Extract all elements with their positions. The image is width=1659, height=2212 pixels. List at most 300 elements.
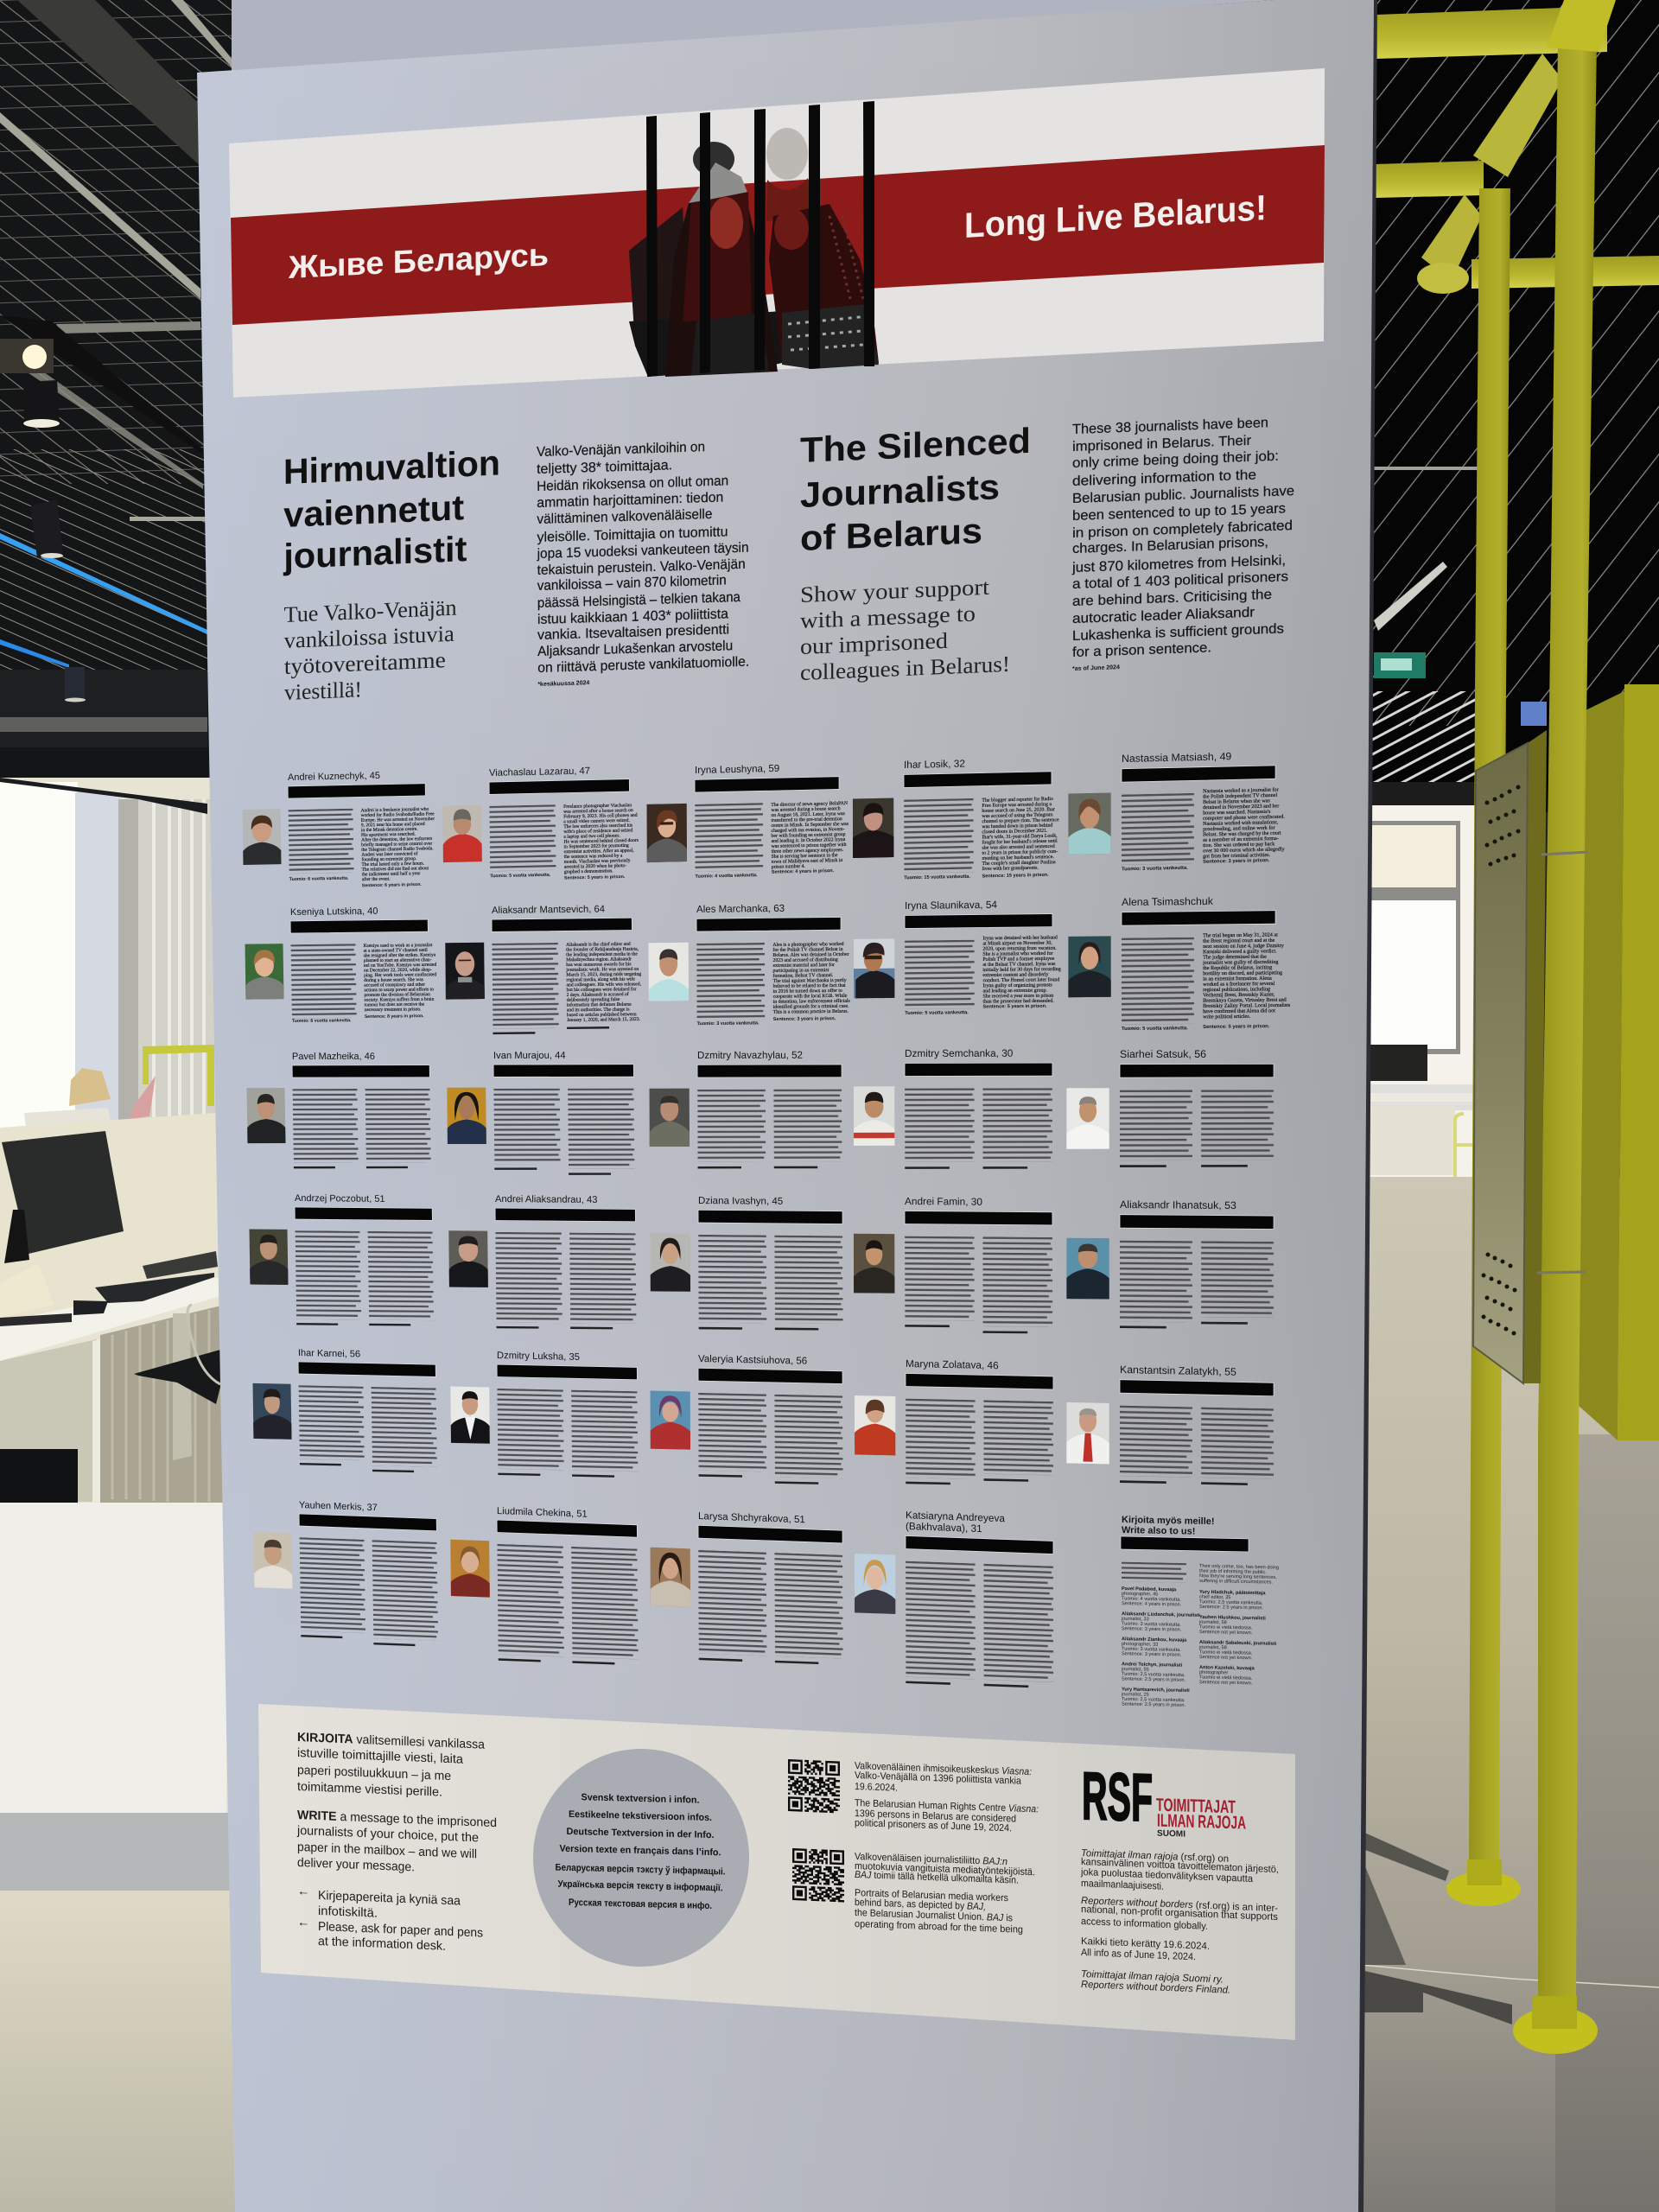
Finnish and English call to action: paper in the mailbox – and we will — [297, 1840, 477, 1861]
translations list — [555, 1792, 726, 1911]
Finnish bio (illegible) — [695, 803, 763, 872]
English bio: ber with founding an extremist group — [772, 831, 846, 839]
English bio: was arrested during a house search — [771, 806, 841, 813]
English bio: but his colleagues were detained for — [567, 986, 637, 993]
English bio: deliberately spreading false — [567, 996, 620, 1003]
Finnish intro text: on riittävä peruste vankilatuomiolle. — [537, 655, 749, 676]
journalist card: Kseniya Lutskina — [245, 906, 437, 1025]
portrait — [448, 1230, 488, 1287]
Finnish intro text: Aljaksandr Lukašenkan arvostelu — [537, 639, 733, 659]
Finnish bio (illegible) — [489, 804, 556, 871]
English bio: His apartment was searched. — [361, 832, 416, 838]
journalist card: Andrei Kuznechyk: Sentence: 6 years in prison. — [362, 882, 422, 888]
English heading and subtitle: with a message to — [800, 601, 976, 633]
journalist card: Andrei Aliaksandrau: Andrei Aliaksandrau, 43 — [495, 1194, 598, 1205]
English bio: centre in Minsk. In September she was — [771, 822, 849, 829]
journalist card: Dziana Ivashyn: Dziana Ivashyn, 45 — [698, 1196, 783, 1207]
English bio: cooperate with the local KGB. While — [773, 994, 848, 1000]
write to us card: Write also to us! — [1122, 1525, 1195, 1537]
English bio: the Telegram channel Radio Svaboda. — [361, 846, 434, 853]
English bio: conduct. The Homel court later found — [982, 976, 1059, 983]
journalist card: Maryna Zolatava — [855, 1357, 1053, 1487]
English bio: she resigned after the strikes. Kseniya — [364, 951, 436, 958]
journalist card: Siarhei Satsuk — [1066, 1048, 1274, 1167]
English bio: He was sentenced behind closed doors — [563, 838, 639, 845]
English bio: wife's place of residence and seized — [563, 827, 633, 835]
Finnish heading and subtitle: viestillä! — [284, 677, 362, 705]
journalist card: Aliaksandr Mantsevich — [445, 904, 642, 1035]
journalist card: Kseniya Lutskina: Sentence: 8 years in prison. — [365, 1014, 424, 1020]
English bio: After the detention, the law enforcers — [361, 836, 432, 843]
English bio: The trial lasted only a few hours. — [361, 861, 425, 868]
QR code: Viasna — [788, 1760, 840, 1812]
journalist card: Siarhei Satsuk: Siarhei Satsuk, 56 — [1120, 1048, 1206, 1060]
RSF logo: SUOMI — [1157, 1829, 1185, 1840]
English bio: Karaiski delivered a guilty verdict. — [1203, 949, 1277, 955]
Viasna text: Valkovenäläinen ihmisoikeuskeskus Viasna: — [855, 1761, 1032, 1777]
English bio: Iryna guilty of organizing protests — [982, 982, 1053, 988]
RSF description: Reporters without borders Finland. — [1081, 1980, 1230, 1996]
bio columns (illegible) — [905, 1236, 1052, 1334]
English bio: extremist content and disorderly — [982, 972, 1049, 978]
portrait — [253, 1532, 292, 1589]
Finnish intro text: yleisölle. Toimittajia on tuomittu — [537, 524, 728, 545]
Finnish heading and subtitle: vankiloissa istuvia — [284, 621, 454, 653]
portrait — [854, 938, 894, 998]
portrait — [445, 943, 485, 1000]
BAJ text: the Belarusian Journalist Union. BAJ is — [855, 1908, 1013, 1923]
English bio: lives with her grandparents. — [982, 866, 1039, 872]
English bio: regional publications, including — [1203, 987, 1270, 993]
English bio: Maladzyechna region. Aliaksandr — [566, 957, 632, 963]
Finnish and English call to action: at the information desk. — [318, 1935, 446, 1954]
list column one: Tuomio: 2,5 vuotta vankeutta. — [1122, 1672, 1185, 1678]
Finnish bio (illegible) — [291, 944, 357, 1019]
English bio: She is a journalist who worked for — [982, 950, 1053, 957]
English intro: suffering in difficult circumstances. — [1199, 1579, 1273, 1586]
English bio: Ihar's wife, 31-year-old Darya Losik, — [982, 833, 1058, 840]
RSF logo: TOIMITTAJAT — [1156, 1796, 1236, 1817]
bottom information panel — [258, 1704, 1295, 2040]
Finnish intro text: vankiloissa – vain 870 kilometrin — [537, 573, 727, 594]
journalist card: Liudmila Chekina: Liudmila Chekina, 51 — [497, 1506, 588, 1520]
English bio: 2 days. Aliaksandr is accused of — [567, 991, 629, 998]
Finnish intro text: tekaistuin perustein. Valko-Venäjän — [537, 557, 746, 578]
Finnish and English call to action: deliver your message. — [297, 1856, 415, 1874]
English bio: Iryna was detained with her husband — [982, 935, 1058, 941]
English bio: extremist activities. After an appeal, — [564, 847, 634, 855]
English bio: Europe. He was arrested on November — [361, 817, 435, 823]
bio columns (illegible) — [493, 1089, 635, 1175]
journalist card: Andrei Famin — [854, 1196, 1052, 1334]
English bio: house was searched. Nastassia's — [1203, 810, 1271, 816]
journalist card: Ihar Losik: Tuomio: 15 vuotta vankeutta. — [904, 874, 970, 880]
English bio: the sentence was reduced by a — [564, 854, 623, 860]
English bio: ping. Her work tools were confiscated — [364, 971, 436, 978]
English bio: worked for Radio Svaboda/Radio Free — [361, 810, 435, 818]
English bio: Andrei is a freelance journalist who — [361, 806, 429, 813]
bio columns (illegible) — [698, 1550, 843, 1665]
portrait — [651, 1548, 690, 1607]
journalist card: Larysa Shchyrakova: Larysa Shchyrakova, 51 — [698, 1511, 805, 1525]
portrait — [854, 1234, 894, 1294]
journalist card: Dziana Ivashyn — [650, 1196, 843, 1331]
list column one: journalist, 25 — [1121, 1692, 1149, 1698]
list column one: Sentence: 4 years in prison. — [1122, 1601, 1182, 1607]
poster panel — [197, 0, 1377, 2212]
English intro text: Belarusian public. Journalists have — [1072, 484, 1294, 506]
portrait — [855, 1554, 895, 1614]
flag stripes — [229, 68, 1325, 397]
English heading and subtitle: Journalists — [800, 467, 1000, 515]
English bio: she was also arrested and sentenced — [982, 844, 1055, 851]
banner text: Belarusian: Жыве Беларусь — [288, 236, 549, 285]
English bio: The blogger and reporter for Radio — [982, 796, 1053, 804]
BAJ text: BAJ toimii tällä hetkellä ulkomailta käsin. — [855, 1870, 1019, 1886]
list column one: Aliaksandr Ziankou, kuvaaja — [1122, 1637, 1187, 1643]
English bio: regional media, along with his wife — [566, 976, 635, 982]
English bio: graphed a demonstration. — [564, 868, 613, 874]
grey language circle — [533, 1749, 749, 1967]
English heading and subtitle: colleagues in Belarus! — [800, 652, 1010, 685]
English intro text: for a prison sentence. — [1072, 640, 1211, 660]
English bio: has won numerous awards for his — [566, 961, 632, 968]
Finnish intro text: ammatin harjoittaminen: tiedon — [537, 491, 723, 511]
list column two: Tuomio: 2,5 vuotta vankeutta. — [1199, 1599, 1263, 1606]
bio columns (illegible) — [698, 1235, 843, 1331]
English bio: on August 18, 2021. Later, Iryna was — [771, 811, 846, 818]
translations list: Svensk textversion i infon. — [581, 1792, 700, 1806]
English bio: promote the division of Belarusian — [364, 991, 430, 998]
English intro text — [1071, 415, 1294, 672]
Viasna text: The Belarusian Human Rights Centre Viasna: — [855, 1798, 1039, 1815]
journalist card: Viachaslau Lazarau: Tuomio: 5 vuotta vankeutta. — [490, 873, 551, 879]
journalist card: Andrei Kuznechyk: Andrei Kuznechyk, 45 — [288, 771, 380, 783]
bio columns (illegible) — [299, 1385, 437, 1473]
RSF description: Kaikki tieto kerätty 19.6.2024. — [1081, 1936, 1210, 1952]
Finnish intro (illegible) — [1122, 1562, 1186, 1583]
English intro: Now they're serving long sentences, — [1199, 1573, 1277, 1580]
BAJ text: operating from abroad for the time being — [855, 1919, 1023, 1936]
list column one: Sentence: 2.5 years in prison. — [1122, 1702, 1185, 1708]
journalist card: Yauhen Merkis — [253, 1498, 438, 1647]
journalist card: Dzmitry Luksha: Dzmitry Luksha, 35 — [497, 1351, 580, 1363]
list column two: Anton Kazelski, kuvaaja — [1199, 1665, 1255, 1671]
list column two: Sentence: 2.5 years in prison. — [1199, 1605, 1263, 1611]
English bio: computer and phone were confiscated. — [1203, 814, 1285, 822]
journalist card: Iryna Leushyna: Sentence: 4 years in prison. — [772, 868, 835, 875]
Finnish intro text — [536, 439, 749, 688]
English bio: The trial began on May 31, 2024 at — [1203, 932, 1278, 938]
English bio: the indictment until half a year — [362, 870, 421, 877]
bio columns (illegible) — [698, 1393, 843, 1485]
English bio: fought for her husband's release until — [982, 838, 1058, 846]
RSF description: access to information globally. — [1081, 1916, 1208, 1932]
English bio: This is a common practice in Belarus. — [773, 1009, 849, 1015]
Finnish and English call to action: Kirjepapereita ja kyniä saa — [318, 1889, 461, 1909]
English bio: The judge determined that the — [1203, 955, 1267, 960]
journalist card: Ivan Murajou — [447, 1051, 635, 1175]
English bio: believed to be related to the fact that — [773, 982, 846, 989]
translations list: Беларуская версія тэксту ў інфармацыі. — [555, 1863, 726, 1877]
English bio: on December 22, 2020, while shop- — [364, 968, 432, 973]
Finnish bio (illegible) — [492, 943, 559, 1029]
portrait — [447, 1088, 486, 1144]
list column two: Aliaksandr Sabaleuski, journalisti — [1199, 1640, 1277, 1647]
English bio: tumour but does not receive the — [365, 1002, 425, 1007]
English bio: the founder of Rehijanalnaja Hazieta, — [566, 946, 639, 953]
portrait — [1068, 936, 1111, 997]
English bio: got from her criminal activities. — [1203, 852, 1271, 860]
portrait — [243, 809, 281, 865]
Finnish and English call to action: KIRJOITA valitsemillesi vankilassa — [297, 1731, 486, 1752]
list column two: Sentence not yet known. — [1199, 1680, 1253, 1686]
English bio: was handed down in prison behind — [982, 823, 1052, 830]
English sentence line (illegible) — [567, 1027, 609, 1029]
Finnish bio (illegible) — [1122, 938, 1194, 1025]
bio columns (illegible) — [497, 1544, 639, 1665]
journalist card: Viachaslau Lazarau — [442, 765, 639, 884]
Finnish and English call to action: istuville toimittajille viesti, laita — [297, 1746, 464, 1767]
English intro: Their only crime, too, has been doing — [1199, 1564, 1279, 1571]
English bio: The couple's small daughter Paulina — [982, 860, 1056, 867]
journalist card: Andrzej Poczobut — [249, 1193, 434, 1326]
journalist card: Kanstantsin Zalatykh: Kanstantsin Zalatykh, 55 — [1120, 1363, 1236, 1378]
BAJ text: muotokuvia vangituista mediatyöntekijöistä. — [855, 1861, 1035, 1878]
English heading and subtitle: The Silenced — [800, 421, 1031, 470]
English bio: 2023 and accused of distributing — [772, 957, 838, 963]
English bio: based on articles published between — [567, 1012, 637, 1018]
list column one: Andrei Tolchyn, journalisti — [1122, 1662, 1183, 1669]
English heading and subtitle: Show your support — [800, 575, 990, 607]
English bio: participating in an extremist — [773, 968, 830, 974]
Viasna text: 19.6.2024. — [855, 1782, 898, 1794]
journalist card: Ales Marchanka — [648, 903, 851, 1027]
translations list: Deutsche Textversion in der Info. — [567, 1827, 714, 1840]
English bio: Belsat. She was charged by the court — [1203, 831, 1281, 838]
journalist card: Alena Tsimashchuk — [1068, 894, 1291, 1033]
English bio: the leading independent media in the — [566, 951, 638, 957]
bio columns (illegible) — [293, 1089, 431, 1168]
bio columns (illegible) — [1120, 1090, 1274, 1167]
QR code: BAJ — [792, 1849, 844, 1901]
journalist card: Aliaksandr Ihanatsuk — [1066, 1198, 1274, 1329]
English bio: at the Belsat TV channel. Iryna was — [982, 962, 1056, 968]
bio columns (illegible) — [1120, 1406, 1274, 1486]
English bio: in detention, law enforcement officials — [773, 998, 851, 1005]
journalist card: Larysa Shchyrakova — [650, 1510, 843, 1665]
English bio: a laptop and two cell phones. — [563, 833, 620, 840]
English bio: worked as a freelancer for several — [1203, 981, 1275, 988]
journalist card: Alena Tsimashchuk: Tuomio: 5 vuotta vankeutta. — [1122, 1026, 1188, 1032]
English bio: three other news agency employees. — [772, 848, 844, 855]
Finnish intro text: istuu kaikkiaan 1 403* poliittista — [537, 607, 728, 627]
RSF description — [1080, 1848, 1279, 1998]
journalist card: Iryna Slaunikava: Sentence: 5 years in prison. — [983, 1004, 1047, 1010]
English bio: house search on June 25, 2020. Ihar — [982, 807, 1055, 814]
journalist card: Ihar Losik: Sentence: 15 years in prison. — [982, 873, 1049, 879]
BAJ text: behind bars, as depicted by BAJ, — [855, 1897, 986, 1912]
list column one: Sentence: 3 years in prison. — [1122, 1626, 1182, 1633]
list column two: Tuomio ei vielä tiedossa. — [1199, 1675, 1253, 1681]
portrait — [649, 943, 689, 1001]
journalist card: Ihar Losik — [853, 756, 1059, 882]
journalist card: Nastassia Matsiash: Sentence: 3 years in prison. — [1203, 858, 1270, 865]
English heading and subtitle: of Belarus — [800, 511, 982, 558]
English bio: formation, Belsat TV channel. — [773, 972, 834, 979]
BAJ text — [855, 1852, 1035, 1936]
English bio: and leading it. In October 2022 Iryna — [772, 837, 846, 844]
English bio: closed doors in December 2021. — [982, 829, 1048, 835]
Finnish bio (illegible) — [289, 809, 354, 874]
translations list: Eestikeelne tekstiversioon infos. — [569, 1809, 712, 1823]
portrait — [247, 1088, 285, 1143]
journalist card: Katsiaryna Andreyeva: (Bakhvalava), 31 — [906, 1520, 982, 1535]
English bio: accused of conspiracy and other — [364, 982, 425, 988]
English bio: and colleagues. His wife was released, — [567, 981, 642, 988]
English bio: in September 2023 for promoting — [564, 842, 629, 849]
English bio: The director of news agency BelaPAN — [771, 800, 849, 808]
English bio: 9, 2021 near his home and placed — [361, 822, 425, 828]
Finnish intro text: vankia. Itsevaltaisen presidentti — [537, 622, 729, 643]
portrait — [450, 1387, 490, 1444]
journalist card: Ivan Murajou: Ivan Murajou, 44 — [493, 1051, 566, 1061]
English bio: as a member of an extremist forma- — [1203, 836, 1279, 843]
journalist card: Ihar Karnei — [252, 1347, 437, 1473]
journalist card: Aliaksandr Ihanatsuk: Aliaksandr Ihanatsuk, 53 — [1120, 1198, 1236, 1211]
English bio: arrested in 2020 when he photo- — [564, 863, 626, 870]
portrait — [442, 805, 482, 862]
list column one: Aliaksandr Lizdanchuk, journalisti — [1122, 1611, 1200, 1618]
English bio: Polish TVP and a former employee — [982, 956, 1055, 963]
English bio: Brestskiy Zaliny Portal. Local journalists — [1203, 1003, 1291, 1009]
English bio: Brestskaya Gazeta, Virtualny Brest and — [1203, 998, 1287, 1004]
English bio: nel on YouTube. Kseniya was arrested — [364, 963, 436, 969]
English bio: in 2016 he turned down an offer to — [773, 988, 842, 995]
English bio: founding an extremist group. — [361, 855, 417, 862]
Viasna text: political prisoners as of June 19, 2024. — [855, 1818, 1012, 1834]
journalist card: Iryna Slaunikava: Iryna Slaunikava, 54 — [905, 899, 997, 912]
English bio: tion. She was ordered to pay back — [1203, 842, 1275, 849]
English bio: Aliaksandr is the chief editor and — [566, 941, 631, 948]
English bio: next session on June 4, judge Dzmitry — [1203, 944, 1285, 950]
Finnish heading and subtitle: vaiennetut — [283, 487, 465, 535]
list column one: journalist, 33 — [1121, 1617, 1149, 1622]
bio columns (illegible) — [1120, 1241, 1274, 1329]
portrait — [450, 1540, 490, 1598]
Finnish and English call to action: toimitamme viestisi perille. — [297, 1780, 442, 1800]
English bio: was accused of using the Telegram — [982, 811, 1053, 819]
list column one: Yury Hantsarevich, journalisti — [1122, 1687, 1190, 1694]
English bio: have confirmed that Alena did not — [1203, 1007, 1275, 1014]
portrait — [1068, 792, 1111, 855]
English bio: The law enforcers also searched his — [563, 822, 632, 830]
write to us card: Kirjoita myös meille! — [1122, 1515, 1215, 1527]
Finnish bio (illegible) — [696, 943, 765, 1021]
English bio: detained in November 2023 and her — [1203, 804, 1279, 810]
English bio: the Polish independent TV channel — [1203, 793, 1278, 800]
English bio: town of Malidyava east of Minsk in — [772, 857, 842, 865]
English intro text: *as of June 2024 — [1072, 664, 1120, 672]
Finnish intro text: päässä Helsingistä – telkien takana — [537, 590, 741, 611]
English bio: The relatives did not find out about — [362, 865, 429, 873]
English bio: briefly managed to seize control over — [361, 841, 432, 848]
English bio: Nastassia worked as a journalist for — [1203, 787, 1279, 794]
English bio: at a state-owned TV channel until — [364, 948, 428, 954]
English bio: extremist material and later for — [772, 962, 835, 969]
English bio: after the event. — [362, 875, 391, 882]
list column two: Sentence not yet known. — [1199, 1630, 1253, 1636]
English bio: society. Kseniya suffers from a brain — [364, 996, 435, 1003]
translations list: Version texte en français dans l’info. — [560, 1844, 721, 1858]
journalist card: Kanstantsin Zalatykh — [1066, 1363, 1274, 1486]
journalist card: Liudmila Chekina — [450, 1504, 639, 1665]
journalist card: Ales Marchanka: Ales Marchanka, 63 — [696, 904, 785, 915]
journalist card: Katsiaryna Andreyeva — [855, 1507, 1053, 1688]
RSF description: joka puolustaa tiedonvälityksen vapautta — [1080, 1867, 1254, 1885]
journalist card: Yauhen Merkis: Yauhen Merkis, 37 — [299, 1500, 378, 1513]
bio columns (illegible) — [697, 1090, 842, 1168]
journalist card: Katsiaryna Andreyeva: Katsiaryna Andreyeva — [906, 1509, 1005, 1524]
Finnish bio (illegible) — [1122, 793, 1194, 865]
Finnish heading and subtitle: journalistit — [283, 529, 467, 576]
English bio: in an extremist formation. Alena — [1203, 976, 1272, 982]
Finnish heading and subtitle: Tue Valko-Venäjän — [284, 595, 457, 627]
English bio: Belarus. Ales was detained in October — [772, 952, 849, 958]
English bio: identified grounds for a criminal case. — [773, 1003, 849, 1010]
background: left room — [0, 778, 242, 2212]
list column two: Tuomio ei vielä tiedossa. — [1199, 1649, 1253, 1656]
journalist card: Viachaslau Lazarau: Viachaslau Lazarau, 47 — [489, 766, 590, 779]
English bio: journalistic work. He was arrested on — [565, 967, 639, 973]
list column two: chief editor, 35 — [1199, 1595, 1230, 1600]
Finnish and English call to action: WRITE a message to the imprisoned — [297, 1808, 497, 1830]
journalist card: Nastassia Matsiash: Tuomio: 3 vuotta vankeutta. — [1122, 866, 1188, 872]
list column two: Yury Hladchuk, päätoimittaja — [1199, 1590, 1266, 1596]
journalist card: Viachaslau Lazarau: Sentence: 5 years in prison. — [564, 874, 626, 881]
English bio: 2020, upon returning from vacation. — [982, 945, 1057, 952]
English bio: over 30 000 euros which she allegedly — [1203, 847, 1286, 854]
English intro text: a total of 1 403 political prisoners — [1072, 569, 1288, 592]
Finnish heading and subtitle: Hirmuvaltion — [283, 442, 500, 492]
portrait — [853, 798, 893, 858]
English bio: charged with tax evasion, in Novem- — [772, 827, 845, 834]
bio columns (illegible) — [906, 1399, 1053, 1487]
portrait — [650, 1089, 690, 1147]
journalist card: Aliaksandr Mantsevich: Aliaksandr Mantsevich, 64 — [492, 904, 605, 916]
journalist card: Dzmitry Navazhylau — [649, 1051, 842, 1169]
English bio: information that defames Belarus — [567, 1001, 632, 1008]
journalist card: Andrei Kuznechyk: Tuomio: 6 vuotta vankeutta. — [289, 876, 349, 882]
yellow pipe feet — [1446, 1859, 1598, 2054]
English bio: February 9, 2023. His cell phones and — [563, 813, 638, 820]
English bio: was arrested after a house search on — [563, 807, 633, 815]
portrait — [855, 1395, 895, 1455]
English intro text: autocratic leader Aliaksandr — [1072, 606, 1255, 626]
list column two: journalist, 58 — [1198, 1620, 1227, 1625]
bio columns (illegible) — [905, 1088, 1052, 1169]
portrait — [250, 1230, 288, 1285]
panel background — [258, 1704, 1295, 2040]
English bio: the Brest regional court and at the — [1203, 938, 1275, 944]
English intro text: been sentenced to up to 15 years — [1072, 501, 1286, 524]
Finnish intro text: teljetty 38* toimittajaa. — [537, 458, 672, 477]
journalist card: Andrei Famin: Andrei Famin, 30 — [905, 1196, 982, 1208]
journalist card: Nastassia Matsiash — [1068, 749, 1286, 874]
list column two: Yauhen Hlushkou, journalisti — [1199, 1615, 1266, 1621]
journalist card: Ihar Karnei: Ihar Karnei, 56 — [298, 1348, 360, 1360]
BAJ text: Valkovenäläisen journalistiliitto BAJ:n — [855, 1852, 1007, 1867]
